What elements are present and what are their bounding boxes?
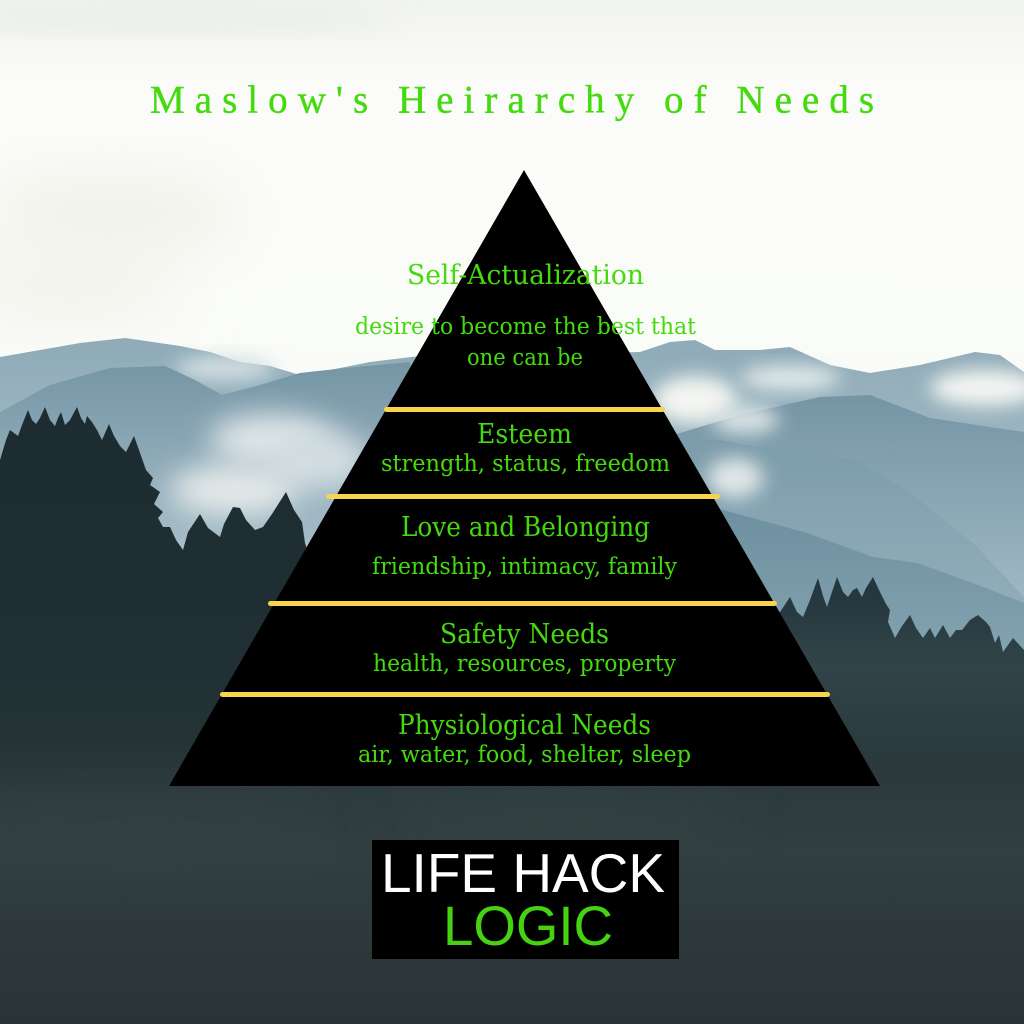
pyramid shape [169, 170, 880, 786]
forest silhouette: right [700, 577, 1024, 820]
logo: Life Hack Logic: LIFE HACK [381, 842, 665, 904]
tier: esteem: Esteem [477, 419, 572, 450]
tier: esteem [381, 419, 670, 477]
divider: esteem / love [326, 494, 720, 499]
tier: esteem: strength, status, freedom [381, 451, 670, 477]
tier: physiological needs [358, 710, 691, 768]
title: Maslow's Heirarchy of Needs [150, 78, 874, 122]
tier: love and belonging: Love and Belonging [401, 512, 650, 543]
tier: self-actualization [355, 260, 697, 371]
forest silhouette: left [0, 407, 700, 820]
divider: safety / physiological [220, 692, 830, 697]
tier: physiological needs: air, water, food, shelter, sleep [358, 742, 691, 768]
tier: self-actualization: Self-Actualization [407, 260, 644, 291]
logo: Life Hack Logic [372, 840, 679, 959]
tier: safety needs: Safety Needs [440, 619, 609, 650]
pyramid [169, 170, 880, 786]
tier: physiological needs: Physiological Needs [398, 710, 651, 741]
tier: self-actualization: one can be [467, 345, 583, 371]
tier: safety needs [373, 619, 676, 677]
tier: self-actualization: desire to become the best that [355, 314, 697, 340]
tier: love and belonging: friendship, intimacy, family [372, 554, 677, 580]
logo: Life Hack Logic: LOGIC [443, 894, 613, 957]
tier: love and belonging [372, 512, 677, 580]
divider: self-actualization / esteem [384, 407, 665, 412]
divider: love / safety [268, 601, 777, 606]
tier: safety needs: health, resources, property [373, 651, 676, 677]
